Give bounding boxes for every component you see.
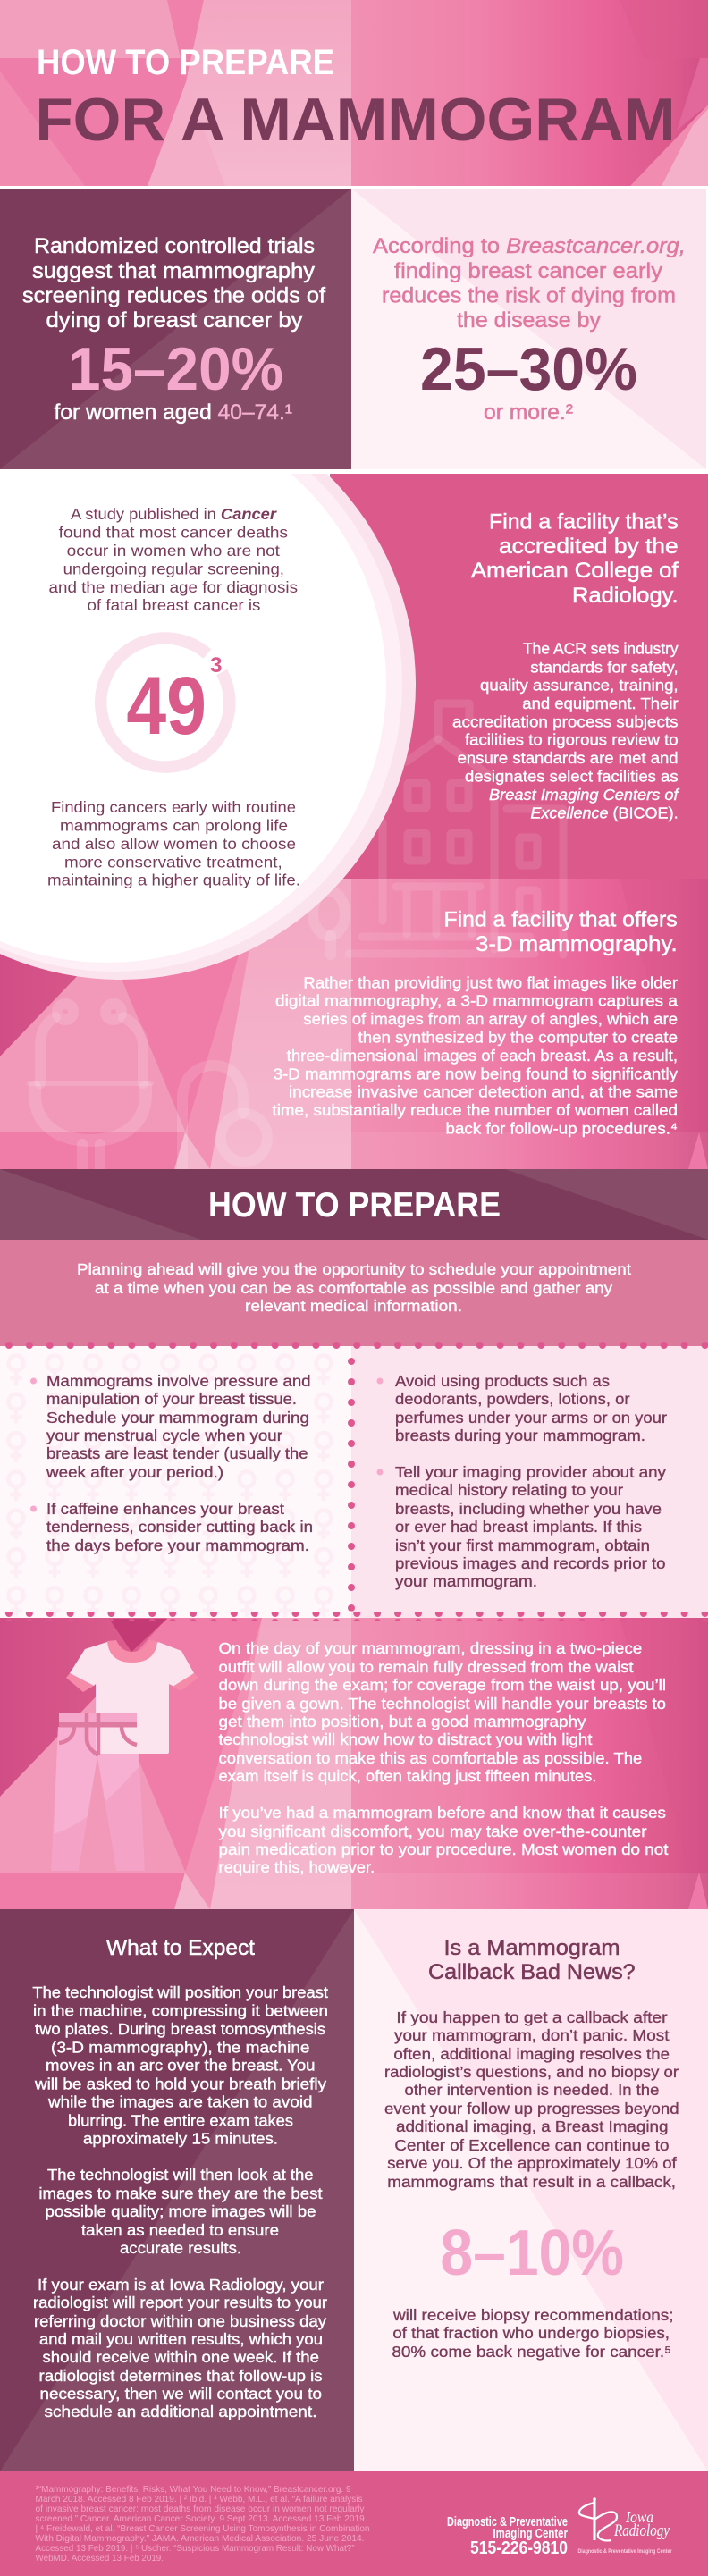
footnotes: ¹“Mammography: Benefits, Risks, What You Need to Know,” Breastcancer.org. 9 (36, 2484, 351, 2495)
statistic text (373, 234, 686, 425)
study text: undergoing regular screening, (63, 560, 284, 578)
intro band: at a time when you can be as comfortable as possible and gather any (95, 1279, 612, 1297)
callback body (384, 2008, 679, 2191)
statistic text: or more.² (484, 400, 573, 425)
study text (48, 505, 298, 614)
accredited body: standards for safety, (530, 658, 678, 676)
expect body: images to make sure they are the best (38, 2185, 323, 2202)
expect body: schedule an additional appointment. (45, 2403, 316, 2420)
panel: 25-30 percent statistic (351, 189, 706, 469)
early detection text: and also allow women to choose (52, 835, 296, 853)
bullet: avoid products (377, 1372, 667, 1444)
number 49 in ring (101, 638, 230, 767)
study text: A study published in Cancer (71, 505, 277, 523)
study text: found that most cancer deaths (59, 524, 288, 542)
accredited body: designates select facilities as (465, 767, 678, 785)
statistic 8-10 percent: 8–10% (440, 2218, 624, 2289)
biopsy text: of that fraction who undergo biopsies, (392, 2324, 670, 2342)
accredited heading (471, 510, 678, 608)
biopsy text: 80% come back negative for cancer.⁵ (392, 2343, 671, 2361)
3-D body: time, substantially reduce the number of women called (272, 1101, 678, 1119)
panel: what to expect (0, 1909, 354, 2471)
bullet: medical history: isn’t your first mammogram, obtain (395, 1536, 650, 1554)
bullet: avoid products: Avoid using products such as (395, 1372, 610, 1390)
bullet: medical history: Tell your imaging provider about any (395, 1463, 666, 1481)
3-D body (272, 973, 678, 1137)
callback body: If you happen to get a callback after (396, 2008, 668, 2026)
callback body: often, additional imaging resolves the (393, 2045, 670, 2063)
bullet: caffeine: the days before your mammogram. (46, 1536, 309, 1554)
accredited body: ensure standards are met and (458, 749, 678, 767)
accredited body: Breast Imaging Centers of (489, 786, 680, 804)
expect body: and mail you written results, which you (39, 2330, 323, 2348)
footnotes: WebMD. Accessed 13 Feb 2019. (36, 2553, 164, 2563)
expect body: taken as needed to ensure (81, 2221, 279, 2239)
callback body: Center of Excellence can continue to (394, 2136, 669, 2154)
3-D body: Rather than providing just two flat images like older (303, 973, 678, 991)
bullet: medical history (377, 1463, 666, 1590)
expect body: in the machine, compressing it between (33, 2001, 328, 2019)
3-D body: increase invasive cancer detection and, at the same (289, 1083, 678, 1101)
expect body: If your exam is at Iowa Radiology, your (38, 2276, 324, 2294)
expect body: referring doctor within one business day (34, 2312, 326, 2330)
logo: Iowa Radiology: Radiology (613, 2521, 670, 2540)
expect body (32, 1983, 328, 2420)
bullet: medical history: previous images and records prior to (395, 1554, 665, 1572)
statistic text: for women aged 40–74.¹ (54, 400, 292, 425)
early detection text: mammograms can prolong life (60, 816, 288, 834)
footnotes: March 2018. Accessed 8 Feb 2019. | ² Ibid. | ³ Webb, M.L., et al. “A failure analysis (36, 2494, 363, 2504)
expect body: radiologist will report your results to your (33, 2294, 327, 2311)
title (36, 43, 676, 154)
study text: of fatal breast cancer is (88, 596, 261, 614)
early detection text: Finding cancers early with routine (51, 798, 296, 816)
logo: Iowa Radiology (577, 2497, 672, 2555)
statistic text: finding breast cancer early (394, 259, 662, 283)
callback body: your mammogram, don’t panic. Most (394, 2026, 670, 2044)
3-D heading (443, 908, 678, 956)
title: FOR A MAMMOGRAM (36, 86, 676, 154)
3-D heading: Find a facility that offers (443, 908, 678, 932)
bullet: pressure and scheduling: Schedule your mammogram during (46, 1409, 309, 1427)
wear text: exam itself is quick, often taking just fifteen minutes. (218, 1767, 597, 1785)
callback body: serve you. Of the approximately 10% of (387, 2154, 677, 2172)
footnotes: Accessed 13 Feb 2019. | ⁵ Uscher. “Suspicious Mammogram Result: Now What?” (36, 2543, 355, 2554)
expect body: possible quality; more images will be (45, 2202, 316, 2220)
callback body: other intervention is needed. In the (404, 2081, 659, 2099)
footnotes (36, 2484, 370, 2563)
accredited heading: American College of (471, 559, 678, 583)
accredited body: quality assurance, training, (480, 677, 678, 695)
footnotes: of invasive breast cancer: most deaths from disease occur in women not regularly (36, 2504, 365, 2514)
panel: preparation tips right (351, 1346, 708, 1618)
statistic text: reduces the risk of dying from (382, 284, 676, 307)
accredited body: accreditation process subjects (452, 712, 678, 730)
accredited heading: Radiology. (572, 584, 678, 608)
wear text: get them into position, but a good mammography (218, 1713, 586, 1730)
early detection text (47, 798, 300, 889)
header faceted background (0, 0, 708, 186)
heading: Callback Bad News? (428, 1960, 636, 1984)
contact details (447, 2515, 568, 2558)
bullet: medical history: or ever had breast implants. If this (395, 1518, 642, 1536)
wear text: require this, however. (218, 1858, 375, 1876)
callback body: additional imaging, a Breast Imaging (396, 2117, 669, 2135)
early detection text: maintaining a higher quality of life. (47, 871, 300, 889)
heading: What to Expect (106, 1936, 255, 1960)
bullet: avoid products: deodorants, powders, lotions, or (395, 1390, 630, 1408)
expect body: moves in an arc over the breast. You (46, 2057, 315, 2075)
bullet: medical history: breasts, including whether you have (395, 1500, 662, 1518)
expect body: accurate results. (120, 2239, 241, 2257)
panel: median age circle (0, 474, 416, 980)
icon: stethoscope (30, 891, 345, 1168)
expect body: necessary, then we will contact you to (39, 2385, 322, 2403)
contact details: 515-226-9810 (470, 2538, 568, 2558)
statistic text: screening reduces the odds of (22, 284, 325, 307)
wear text: you significant discomfort, you may take over-the-counter (218, 1823, 647, 1840)
footnotes: screened.” Cancer. American Cancer Society. 9 Sept 2013. Accessed 13 Feb 2019. (36, 2513, 367, 2524)
wear text: be given a gown. The technologist will handle your breasts to (218, 1695, 666, 1713)
contact details: Diagnostic & Preventative (447, 2515, 568, 2530)
3-D body: three-dimensional images of each breast. As a result, (287, 1047, 678, 1065)
wear text: down during the exam; for coverage from the waist up, you’ll (218, 1676, 666, 1694)
bullet: pressure and scheduling: breasts are least tender (usually the (46, 1444, 308, 1462)
statistic text: dying of breast cancer by (46, 308, 302, 333)
3-D body: 3-D mammograms are now being found to significantly (274, 1065, 678, 1082)
intro band (0, 1240, 708, 1346)
panel: preparation tips left (0, 1346, 351, 1618)
expect body: while the images are taken to avoid (47, 2093, 313, 2111)
bullet: medical history: medical history relating to your (395, 1481, 623, 1499)
early detection text: more conservative treatment, (64, 853, 282, 871)
3-D heading: 3-D mammography. (476, 932, 678, 956)
bullet: caffeine: If caffeine enhances your breast (46, 1500, 284, 1518)
number 49 in ring: 3 (210, 653, 222, 678)
callback body: radiologist’s questions, and no biopsy or (384, 2063, 678, 2081)
footer (0, 2471, 708, 2576)
section background: 3-D mammography (0, 878, 708, 1169)
heading band: how to prepare (0, 1169, 708, 1240)
expect body: The technologist will position your breast (32, 1983, 328, 2001)
statistic text (22, 234, 325, 425)
3-D body: digital mammography, a 3-D mammogram captures a (275, 992, 678, 1010)
accredited body: and equipment. Their (522, 695, 678, 712)
wear text: If you’ve had a mammogram before and know that it causes (218, 1804, 666, 1822)
bullet: pressure and scheduling: Mammograms involve pressure and (46, 1372, 310, 1390)
callback body: mammograms that result in a callback, (387, 2173, 676, 2191)
text block: accredited facility (452, 510, 680, 821)
expect body: should receive within one week. If the (43, 2348, 319, 2366)
logo: Iowa Radiology: Diagnostic & Preventative Imaging Center (577, 2548, 672, 2555)
expect body: will be asked to hold your breath briefly (34, 2075, 326, 2092)
panel: 15-20 percent statistic (0, 189, 351, 469)
bullet: pressure and scheduling (30, 1372, 310, 1481)
3-D body: series of images from an array of angles, which are (303, 1010, 678, 1028)
title: HOW TO PREPARE (37, 43, 334, 82)
panel: accredited facility background (330, 474, 708, 879)
wear text: technologist will know how to distract you with light (218, 1730, 593, 1748)
accredited body: The ACR sets industry (523, 640, 678, 658)
intro band: relevant medical information. (245, 1297, 462, 1315)
biopsy text (392, 2306, 674, 2361)
accredited body (452, 640, 680, 821)
3-D body: back for follow-up procedures.⁴ (445, 1119, 678, 1137)
accredited heading: accredited by the (499, 535, 678, 559)
accredited heading: Find a facility that’s (489, 510, 678, 535)
contact details: Imaging Center (493, 2527, 568, 2541)
expect body: radiologist determines that follow-up is (39, 2367, 323, 2385)
statistic text: Randomized controlled trials (34, 234, 315, 258)
wear text: On the day of your mammogram, dressing in a two-piece (218, 1639, 642, 1657)
heading: Is a Mammogram (443, 1936, 620, 1960)
wear text: pain medication prior to your procedure. Most women do not (218, 1840, 669, 1858)
statistic text: suggest that mammography (32, 259, 315, 283)
logo: Iowa Radiology: Iowa (625, 2508, 653, 2526)
wear text: outfit will allow you to remain fully dressed from the waist (218, 1658, 634, 1676)
expect body: (3-D mammography), the machine (51, 2039, 309, 2057)
footnotes: | ⁴ Freidewald, et al. “Breast Cancer Screening Using Tomosynthesis in Combination (36, 2523, 370, 2534)
bullet: pressure and scheduling: your menstrual cycle when your (46, 1427, 282, 1444)
bullet: avoid products: breasts during your mammogram. (395, 1427, 645, 1444)
statistic text: 25–30% (420, 335, 637, 403)
text block: 3-D mammography (272, 908, 678, 1137)
callback body: event your follow up progresses beyond (384, 2100, 679, 2117)
wear text (218, 1639, 669, 1876)
intro band: Planning ahead will give you the opportunity to schedule your appointment (77, 1260, 631, 1278)
heading (428, 1936, 636, 1984)
bullet: caffeine: tenderness, consider cutting back in (46, 1518, 313, 1536)
study text: and the median age for diagnosis (48, 578, 298, 596)
footnotes: With Digital Mammography.” JAMA. American Medical Association. 25 June 2014. (36, 2533, 365, 2544)
icon: hospital building (349, 703, 563, 955)
panel: what to wear (0, 1618, 708, 1909)
bullet: caffeine (30, 1500, 313, 1554)
number 49 in ring: 49 (126, 661, 206, 752)
icon: shirt and pants (51, 1619, 198, 1871)
bullet: avoid products: perfumes under your arms or on your (395, 1409, 667, 1427)
statistic text: According to Breastcancer.org, (373, 234, 686, 258)
statistic text: the disease by (457, 308, 601, 333)
expect body: blurring. The entire exam takes (68, 2111, 293, 2129)
biopsy text: will receive biopsy recommendations; (392, 2306, 674, 2324)
panel: callback news (354, 1909, 708, 2471)
statistic text: 15–20% (68, 335, 283, 403)
study text: occur in women who are not (67, 542, 280, 560)
3-D body: then synthesized by the computer to create (358, 1028, 678, 1046)
expect body: approximately 15 minutes. (83, 2130, 278, 2148)
dotted dividers (0, 1342, 708, 1621)
expect body: two plates. During breast tomosynthesis (35, 2020, 325, 2038)
bullet: pressure and scheduling: week after your period.) (46, 1463, 223, 1481)
expect body: The technologist will then look at the (47, 2166, 313, 2184)
bullet: medical history: your mammogram. (395, 1572, 537, 1590)
bullet: pressure and scheduling: manipulation of your breast tissue. (46, 1390, 297, 1408)
accredited body: facilities to rigorous review to (465, 731, 678, 749)
header panel (0, 0, 708, 186)
heading band: how to prepare: HOW TO PREPARE (208, 1186, 501, 1225)
accredited body: Excellence (BICOE). (530, 804, 678, 821)
wear text: conversation to make this as comfortable as possible. The (218, 1749, 642, 1767)
